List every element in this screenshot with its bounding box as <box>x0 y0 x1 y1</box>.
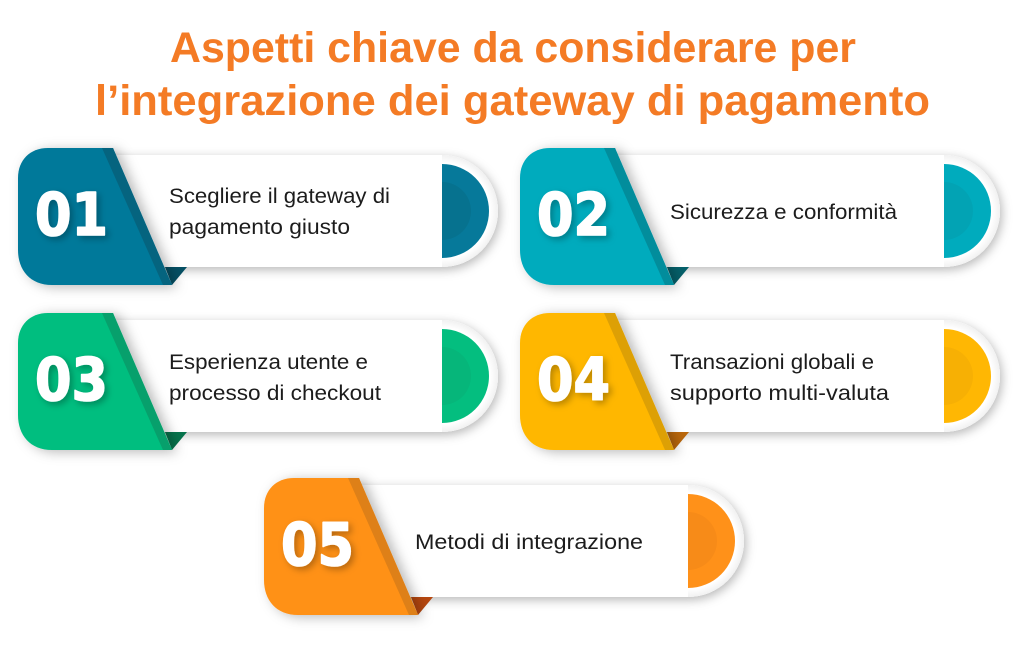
number 03: 03 <box>35 345 108 414</box>
card end ring 01 <box>442 155 498 267</box>
title <box>95 25 930 125</box>
fold 04 <box>667 432 689 450</box>
card end ring 02 <box>944 155 1000 267</box>
panel: 03 <box>18 313 498 450</box>
tab edge 01 <box>102 148 172 285</box>
tab edge 05 <box>348 478 418 615</box>
fold 02 <box>667 267 689 285</box>
label 01 <box>169 184 390 239</box>
label 04: supporto multi-valuta <box>670 381 889 405</box>
tab edge 04 <box>604 313 674 450</box>
label 03 <box>169 350 381 405</box>
label 01: pagamento giusto <box>169 215 350 239</box>
number tab 02 <box>520 148 674 285</box>
number tab 01 <box>18 148 172 285</box>
white card 02 <box>602 155 1000 267</box>
number 05: 05 <box>281 510 354 579</box>
fold 01 <box>165 267 187 285</box>
tab edge 02 <box>604 148 674 285</box>
label 03: processo di checkout <box>169 381 381 405</box>
number 04: 04 <box>537 345 610 414</box>
label 04 <box>670 350 889 405</box>
half circle 01 <box>442 164 489 258</box>
tab edge 03 <box>102 313 172 450</box>
half circle 05 <box>688 494 735 588</box>
label 04: Transazioni globali e <box>670 350 874 374</box>
white card 03 <box>100 320 498 432</box>
panel: 04 <box>520 313 1000 450</box>
card end ring 03 <box>442 320 498 432</box>
title: Aspetti chiave da considerare per <box>170 25 856 72</box>
fold 03 <box>165 432 187 450</box>
label 01: Scegliere il gateway di <box>169 184 390 208</box>
title: l’integrazione dei gateway di pagamento <box>95 78 930 125</box>
card end ring 05 <box>688 485 744 597</box>
label 03: Esperienza utente e <box>169 350 368 374</box>
panel: 01 <box>18 148 498 285</box>
half circle 02 <box>944 164 991 258</box>
white card 04 <box>602 320 1000 432</box>
number tab 04 <box>520 313 674 450</box>
number 01: 01 <box>35 180 108 249</box>
panel: 02 <box>520 148 1000 285</box>
half circle 04 <box>944 329 991 423</box>
label 05: Metodi di integrazione <box>415 530 643 554</box>
white card 05 <box>346 485 744 597</box>
number 02: 02 <box>537 180 610 249</box>
half circle 03 <box>442 329 489 423</box>
panel: 05 <box>264 478 744 615</box>
number tab 03 <box>18 313 172 450</box>
label 02: Sicurezza e conformità <box>670 200 897 224</box>
white card 01 <box>100 155 498 267</box>
fold 05 <box>411 597 433 615</box>
number tab 05 <box>264 478 418 615</box>
card end ring 04 <box>944 320 1000 432</box>
